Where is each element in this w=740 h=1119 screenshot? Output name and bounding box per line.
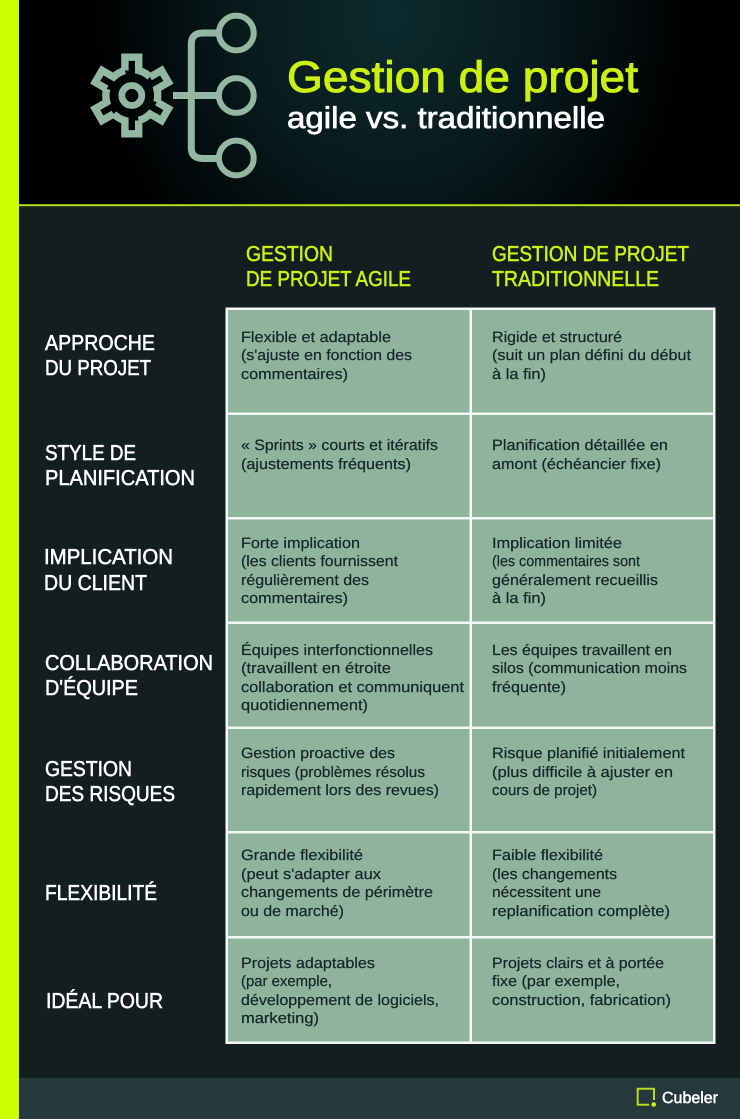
cell: collaboration agile [241,641,465,714]
column heading: traditional: GESTION DE PROJET [492,242,689,266]
cell: implication agile [241,535,399,607]
title [287,53,638,135]
cell: ideal agile: (par exemple, [241,973,332,990]
column heading: traditional: TRADITIONNELLE [492,267,659,291]
row label: risques: GESTION [45,757,132,781]
icon: gear with branching nodes [90,16,254,175]
column heading: agile: GESTION [246,242,333,266]
cell: risques agile: Gestion proactive des [241,745,395,762]
cell: implication traditionnelle: à la fin) [492,590,546,607]
icon: top node [219,16,254,50]
cell: approche traditionnelle [492,329,692,383]
cell: implication traditionnelle: généralement recueillis [492,572,658,589]
cell: implication agile: (les clients fournissent [241,553,399,570]
logo: Cubeler [638,1089,719,1107]
cell: approche agile: Flexible et adaptable [241,329,391,346]
cell: risques traditionnelle [492,745,686,799]
row label: approche: DU PROJET [45,356,151,380]
row label: implication [44,545,173,595]
cell: implication agile: Forte implication [241,535,360,552]
cell: planification traditionnelle: amont (échéancier fixe) [492,456,661,473]
cell: planification traditionnelle: Planification détaillée en [492,437,668,454]
row label: flexibilite: FLEXIBILITÉ [45,881,157,905]
cell: risques agile: risques (problèmes résolus [241,764,425,781]
cell: collaboration agile: Équipes interfonctionnelles [241,641,433,659]
cell: collaboration traditionnelle: silos (communication moins [492,660,687,677]
row label: planification [45,441,195,490]
left accent bar [0,0,19,1119]
footer band [19,1078,740,1119]
cell: flexibilite agile: changements de périmètre [241,884,433,901]
cell: flexibilite traditionnelle: replanification complète) [492,903,670,920]
row label: approche: APPROCHE [45,331,155,355]
column heading: traditional [492,242,689,291]
column heading: agile: DE PROJET AGILE [246,267,411,291]
row label: ideal pour: IDÉAL POUR [46,989,163,1013]
cell: collaboration agile: collaboration et communiquent [241,679,465,696]
cell: approche agile: commentaires) [241,366,348,383]
cell: implication agile: commentaires) [241,590,348,607]
cell: collaboration agile: quotidiennement) [241,697,368,714]
row label: implication: DU CLIENT [44,571,147,595]
row label: approche [45,331,155,380]
cell: flexibilite traditionnelle [492,847,670,920]
row label: implication: IMPLICATION [44,545,173,569]
cell: collaboration traditionnelle: fréquente) [492,679,566,696]
cell: approche agile: (s'ajuste en fonction des [241,347,412,364]
cell: approche agile [241,329,412,383]
cell: collaboration traditionnelle: Les équipes travaillent en [492,642,672,659]
row label: risques [45,757,175,806]
icon: logo square [638,1089,656,1107]
cell: implication traditionnelle [492,535,658,607]
cell: planification traditionnelle [492,437,668,473]
cell: flexibilite agile: Grande flexibilité [241,847,363,864]
cell: flexibilite traditionnelle: Faible flexibilité [492,847,603,864]
cell: collaboration traditionnelle [492,642,687,696]
cell: flexibilite agile [241,847,433,920]
icon: branch connector [173,33,219,158]
cell: risques traditionnelle: Risque planifié initialement [492,745,686,762]
cell: ideal traditionnelle: Projets clairs et à portée [492,955,664,972]
row label: planification: STYLE DE [45,441,136,465]
cell: approche traditionnelle: à la fin) [492,366,546,383]
row label: planification: PLANIFICATION [45,466,195,490]
row label: collaboration: COLLABORATION [45,651,213,675]
cell: risques agile [241,745,439,799]
cell: ideal agile: développement de logiciels, [241,992,439,1009]
row labels [44,331,213,1013]
cell: risques agile: rapidement lors des revues) [241,782,439,799]
cell: ideal agile [241,955,439,1027]
cell: ideal traditionnelle: construction, fabrication) [492,992,671,1009]
icon: middle node [219,78,254,113]
cell: flexibilite agile: (peut s'adapter aux [241,866,382,883]
cell: collaboration agile: (travaillent en étroite [241,660,391,677]
title: agile vs. traditionnelle [287,102,605,135]
cell: ideal traditionnelle: fixe (par exemple, [492,973,620,990]
row label: collaboration [45,651,213,700]
cell: planification agile: « Sprints » courts et itératifs [241,437,438,454]
cell: flexibilite traditionnelle: (les changements [492,866,617,883]
title: Gestion de projet [287,53,638,102]
cell: flexibilite traditionnelle: nécessitent une [492,884,601,901]
cell: approche traditionnelle: Rigide et structuré [492,329,622,346]
cell: implication agile: régulièrement des [241,572,369,589]
cell: risques traditionnelle: (plus difficile à ajuster en [492,764,673,781]
cell: implication traditionnelle: Implication limitée [492,535,622,552]
logo: Cubeler: Cubeler [662,1090,719,1107]
row label: risques: DES RISQUES [45,782,175,806]
cell: ideal agile: marketing) [241,1010,319,1027]
cell: planification agile: (ajustements fréquents) [241,456,411,473]
icon: bottom node [219,141,254,175]
cell: ideal traditionnelle [492,955,671,1009]
cell: approche traditionnelle: (suit un plan défini du début [492,347,692,364]
column heading: agile [246,242,411,291]
cell: risques traditionnelle: cours de projet) [492,782,597,799]
cell: planification agile [241,437,438,473]
cell: implication traditionnelle: (les commentaires sont [492,553,641,570]
header band [19,0,740,206]
icon: gear [90,57,174,134]
row label: collaboration: D'ÉQUIPE [45,676,138,700]
cell: flexibilite agile: ou de marché) [241,903,344,920]
cell: ideal agile: Projets adaptables [241,955,375,972]
comparison table [226,308,716,1044]
